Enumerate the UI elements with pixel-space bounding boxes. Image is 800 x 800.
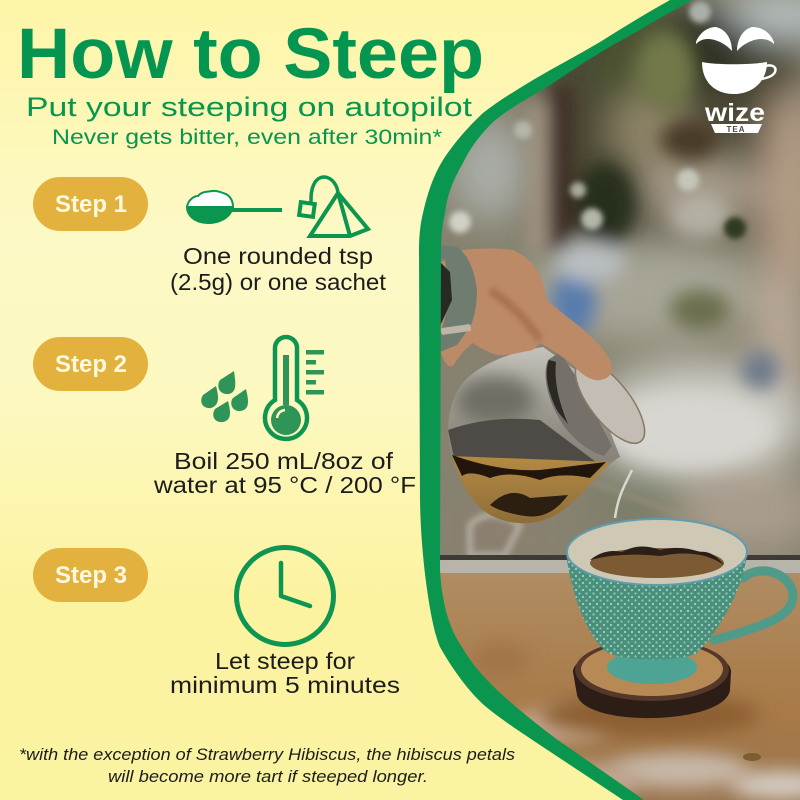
step 1 text [170,243,387,295]
photo: pouring stream [615,470,632,518]
icon: clock [236,548,334,644]
cup foot [607,656,697,684]
step 1 badge: Step 1 [55,191,127,218]
logo left leaf [696,27,732,51]
step 2 text: Boil 250 mL/8oz of [174,448,394,474]
cup bowl [566,553,747,660]
step 3 text: minimum 5 minutes [170,672,400,698]
tea in cup [590,548,724,578]
lid [574,368,646,444]
step 2 text: water at 95 °C / 200 °F [153,472,416,498]
icon: measuring spoon with powder [186,191,282,224]
cup handle [714,571,793,640]
step 1 badge [33,177,148,231]
logo wordmark: wize [704,99,765,127]
icon: tea sachet [299,177,368,236]
footnote: will become more tart if steeped longer. [108,768,428,786]
icon: water drops [201,371,248,422]
photo: window sill and wooden table [400,555,800,800]
tagline: Never gets bitter, even after 30min* [52,126,442,149]
photo: green dotted tea cup [566,519,793,684]
logo right leaf [737,27,774,51]
logo banner: TEA [726,125,746,134]
step 2 text [153,448,416,498]
logo cup [702,62,767,94]
photo: wrist watch band [440,245,477,352]
tea leaves [448,418,596,462]
step 3 badge: Step 3 [55,562,127,589]
photo: hand [440,248,612,380]
step 2 badge [33,337,148,391]
dark leaf band [452,455,606,480]
photo: wooden coaster [573,639,731,718]
cup interior [567,519,747,585]
icon: thermometer [265,337,324,439]
step 3 badge [33,548,148,602]
photo background: blurred garden [440,0,800,555]
step 1 text: (2.5g) or one sachet [170,269,387,295]
logo cup handle [761,65,775,79]
teapot glass [448,347,620,523]
step 2 badge: Step 2 [55,351,127,378]
step 3 text: Let steep for [215,648,355,674]
photo: glass teapot [448,347,657,530]
step 1 text: One rounded tsp [183,243,373,269]
strainer [546,352,612,456]
footnote: *with the exception of Strawberry Hibiscus, the hibiscus petals [19,746,515,764]
step 3 text [170,648,400,698]
footnote [19,746,515,786]
photo: pouring tea into a green cup [400,0,800,800]
logo: wize tea [696,27,775,134]
title: How to Steep [17,15,484,94]
subtitle: Put your steeping on autopilot [26,92,473,122]
brewed tea [450,456,610,530]
